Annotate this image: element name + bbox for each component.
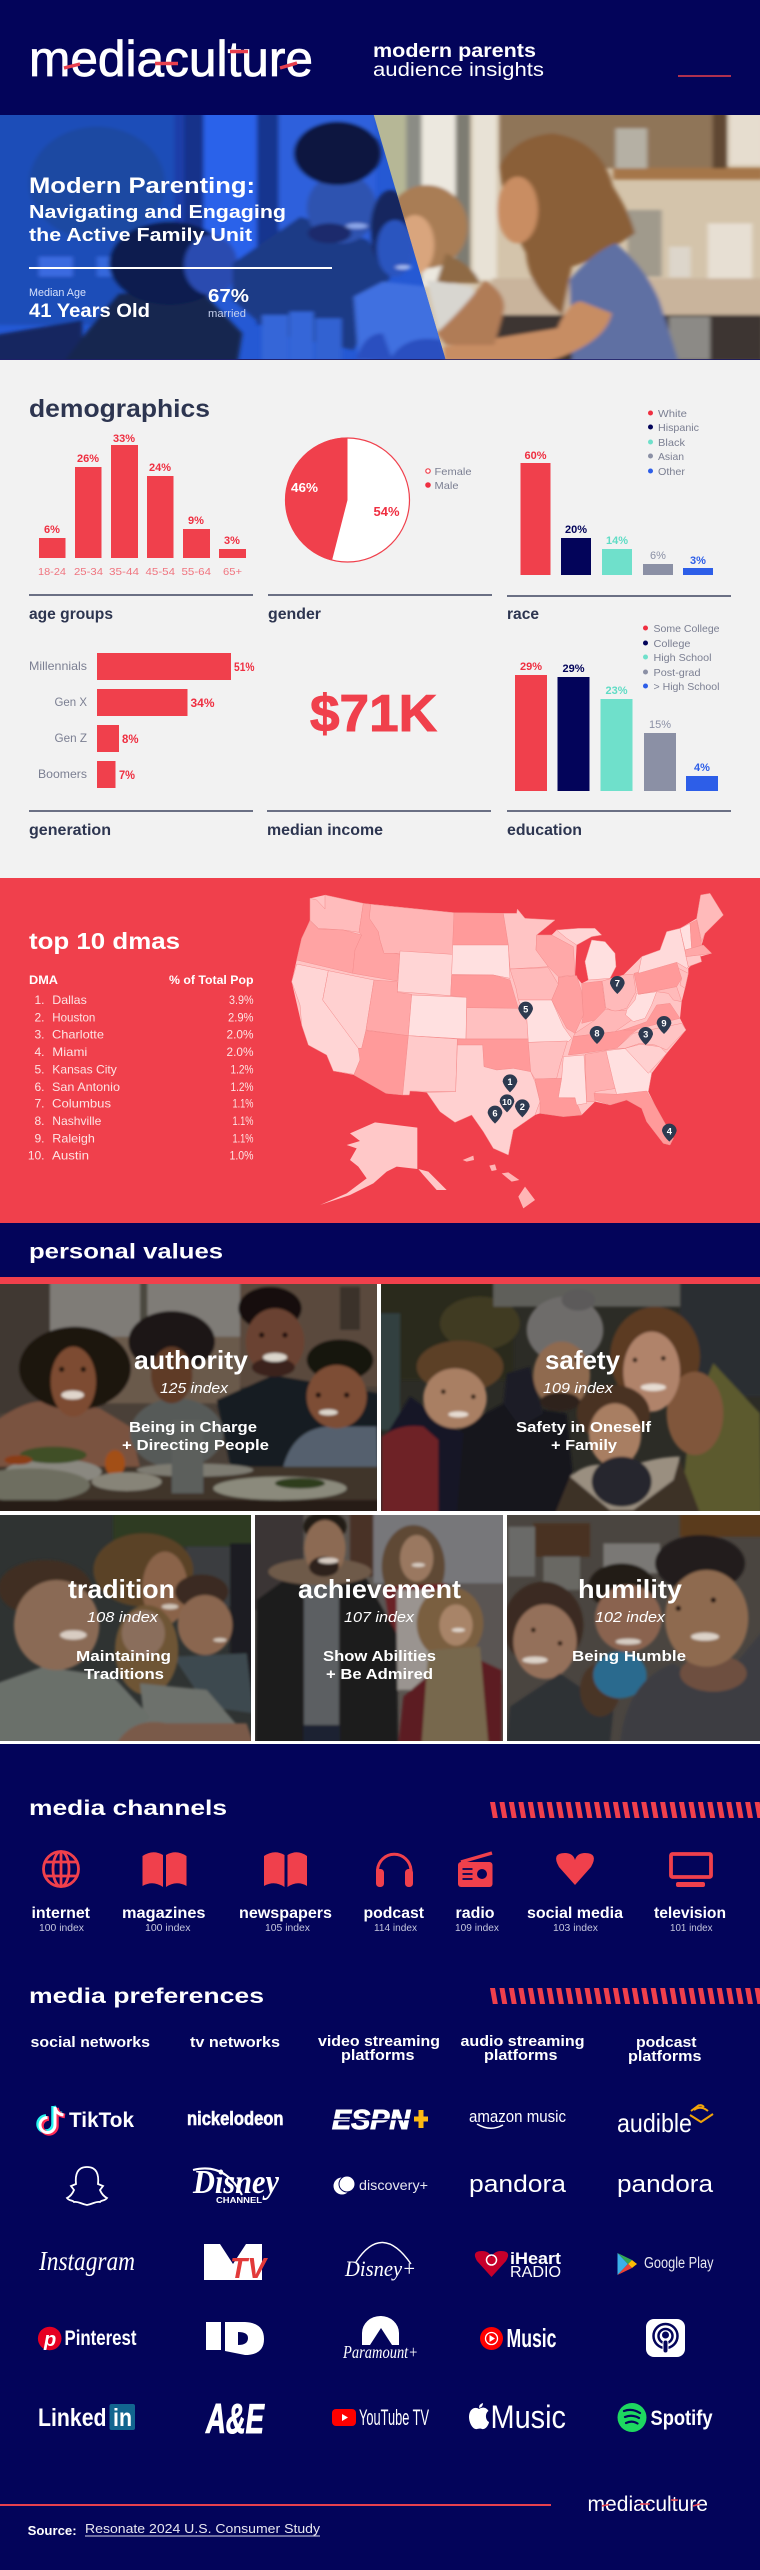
legend: education: College bbox=[654, 638, 691, 650]
pin: 1 dallas bbox=[503, 1074, 517, 1092]
card: tradition bbox=[0, 1510, 253, 1743]
table: dma list: 2. bbox=[34, 1010, 44, 1024]
chart: age groups: 18-24 bbox=[38, 566, 66, 578]
pin: 8 nashville: 8 bbox=[594, 1029, 600, 1039]
source note bbox=[28, 2521, 321, 2538]
legend: education: > High School bbox=[654, 681, 720, 693]
legend: education: Some College bbox=[654, 623, 720, 635]
hawaii bbox=[463, 1156, 535, 1208]
logo: pinterest: Pinterest bbox=[64, 2327, 136, 2350]
card: achievement: achievement bbox=[298, 1574, 461, 1604]
table: dma list: Kansas City bbox=[52, 1062, 117, 1076]
pin: 2 houston: 2 bbox=[520, 1102, 525, 1112]
channel: magazines bbox=[122, 1852, 206, 1934]
pin: 10 austin bbox=[500, 1094, 514, 1112]
logo: mediaculture small: mediaculture bbox=[588, 2493, 708, 2516]
card: achievement: + Be Admired bbox=[326, 1666, 433, 1683]
channel: podcast bbox=[364, 1854, 425, 1934]
chart: age groups: 65+ bbox=[223, 566, 242, 578]
icon: open book bbox=[264, 1852, 307, 1887]
chart: gender pie: 46% bbox=[291, 481, 318, 495]
chart: age groups: 6% bbox=[44, 524, 60, 536]
icon: headphones bbox=[376, 1854, 413, 1887]
chart: gender pie: 54% bbox=[374, 505, 400, 519]
heading: top 10 dmas: top 10 dmas bbox=[29, 928, 180, 954]
table: dma list: Austin bbox=[52, 1149, 89, 1163]
hero title: Navigating and Engaging bbox=[29, 202, 286, 222]
chart: generation: Boomers bbox=[38, 767, 87, 781]
logo: paramount+: Paramount+ bbox=[342, 2342, 418, 2362]
column headers: social networks bbox=[30, 2034, 150, 2051]
logo: spotify: Spotify bbox=[650, 2407, 713, 2430]
icon: radio bbox=[458, 1853, 492, 1887]
channel: internet: internet bbox=[32, 1905, 91, 1922]
heading: media preferences: media preferences bbox=[29, 1985, 264, 2008]
chart: age groups: 3% bbox=[224, 535, 240, 547]
table: dma list: Columbus bbox=[52, 1097, 111, 1111]
logo: pinterest bbox=[38, 2327, 136, 2351]
label: median income: median income bbox=[267, 822, 383, 839]
channel: radio: 109 index bbox=[455, 1923, 499, 1934]
chart: gender pie: Male bbox=[434, 480, 459, 492]
channel: radio bbox=[455, 1853, 499, 1934]
pin: 6 san antonio bbox=[488, 1106, 502, 1124]
table: dma list: 3. bbox=[34, 1028, 44, 1042]
pin: 10 austin: 10 bbox=[502, 1097, 512, 1107]
card: humility: Being Humble bbox=[572, 1648, 686, 1665]
column headers: platforms bbox=[341, 2047, 414, 2064]
hero photo panel bbox=[0, 112, 760, 363]
panel: media channels bbox=[0, 1744, 760, 2570]
channel: social media: 103 index bbox=[553, 1923, 598, 1934]
channel: newspapers: newspapers bbox=[239, 1905, 332, 1922]
stat: married bbox=[208, 286, 249, 320]
table: dma list: % of Total Pop bbox=[169, 973, 254, 987]
chart: race: 20% bbox=[565, 524, 587, 536]
source note: Source: bbox=[28, 2523, 77, 2538]
channel: television bbox=[654, 1854, 726, 1934]
channel: television: 101 index bbox=[670, 1923, 712, 1934]
logo: investigation discovery bbox=[206, 2322, 264, 2355]
label: race: race bbox=[507, 606, 539, 623]
logo: tiktok bbox=[39, 2106, 134, 2134]
table: dma list: 2.0% bbox=[226, 1045, 254, 1059]
pin: 2 houston bbox=[515, 1099, 530, 1117]
table: dma list: 9. bbox=[34, 1131, 44, 1145]
card: humility: 102 index bbox=[595, 1609, 666, 1626]
chart: race: 3% bbox=[690, 555, 706, 567]
chart: age groups: 9% bbox=[188, 515, 204, 527]
pin: 4 miami: 4 bbox=[667, 1126, 673, 1136]
heading: demographics: demographics bbox=[29, 395, 210, 423]
logo: pandora video/audio column: pandora bbox=[469, 2171, 567, 2198]
header title bbox=[373, 40, 544, 81]
table: dma list: DMA bbox=[29, 973, 58, 987]
chart: age groups: 25-34 bbox=[74, 566, 103, 578]
chart: education: 23% bbox=[605, 685, 628, 697]
table: dma list: 7. bbox=[34, 1097, 44, 1111]
stat: median age bbox=[29, 287, 150, 322]
chart: generation: Gen X bbox=[54, 695, 87, 709]
logo: disney+: Disney+ bbox=[344, 2256, 416, 2281]
card: safety: Safety in Oneself bbox=[516, 1419, 652, 1436]
card: authority: authority bbox=[134, 1345, 249, 1375]
chart: age groups: 33% bbox=[113, 433, 135, 445]
photo: blue duotone father and child bbox=[0, 112, 448, 363]
pin: 5 kansas city: 5 bbox=[523, 1004, 528, 1014]
legend: race: Other bbox=[658, 466, 686, 478]
chart: race bbox=[520, 408, 713, 575]
logo: linkedin: in bbox=[113, 2404, 132, 2432]
channel: newspapers: 105 index bbox=[265, 1923, 310, 1934]
table: dma list bbox=[28, 973, 254, 1163]
logo: iheart radio bbox=[475, 2249, 561, 2281]
card: tradition: 108 index bbox=[87, 1609, 159, 1626]
column headers: podcast bbox=[636, 2034, 696, 2051]
channel: internet: 100 index bbox=[39, 1923, 84, 1934]
card: safety: safety bbox=[545, 1345, 621, 1375]
logo: disney channel: CHANNEL bbox=[216, 2195, 262, 2205]
column headers: platforms bbox=[628, 2048, 702, 2065]
logo: disney+ bbox=[344, 2242, 416, 2281]
alaska bbox=[320, 1122, 447, 1205]
pin: 9 raleigh bbox=[657, 1016, 671, 1034]
table: dma list: Dallas bbox=[52, 993, 87, 1007]
footer bbox=[0, 2493, 708, 2538]
icon: heart bbox=[556, 1853, 594, 1885]
chart: education: 4% bbox=[694, 762, 710, 774]
logo: discovery+ bbox=[334, 2176, 428, 2194]
table: dma list: Miami bbox=[52, 1045, 87, 1059]
table: dma list: 10. bbox=[28, 1149, 44, 1163]
pin: 8 nashville bbox=[590, 1026, 604, 1044]
chart: generation: Gen Z bbox=[54, 731, 87, 745]
icon: open book bbox=[142, 1852, 186, 1887]
channel: podcast: podcast bbox=[364, 1905, 425, 1922]
panel: media preferences bbox=[29, 1985, 760, 2442]
table: dma list: 1.2% bbox=[230, 1080, 254, 1094]
table: dma list: 4. bbox=[34, 1045, 44, 1059]
logo: youtube music bbox=[480, 2323, 556, 2353]
label: gender: gender bbox=[268, 606, 321, 623]
column headers bbox=[30, 2033, 702, 2065]
logo: mediaculture: mediaculture bbox=[29, 31, 313, 87]
card: authority: 125 index bbox=[160, 1380, 229, 1397]
logo: youtube tv bbox=[332, 2405, 429, 2430]
table: dma list: 3.9% bbox=[229, 993, 254, 1007]
label: education: education bbox=[507, 822, 582, 839]
logo: iheart radio: RADIO bbox=[510, 2264, 561, 2281]
table: dma list: 5. bbox=[34, 1062, 44, 1076]
card: tradition: Maintaining bbox=[76, 1648, 171, 1665]
table: dma list: 1.2% bbox=[230, 1062, 254, 1076]
logo: iheart radio: iHeart bbox=[510, 2249, 561, 2268]
chart: age groups: 45-54 bbox=[146, 566, 175, 578]
column headers: platforms bbox=[484, 2047, 558, 2064]
logo: snapchat bbox=[67, 2167, 107, 2205]
pin: 7 columbus bbox=[610, 976, 625, 994]
chart: education: 15% bbox=[649, 719, 671, 731]
logo: pandora podcast column: pandora bbox=[617, 2171, 714, 2198]
logo: investigation discovery: ID bbox=[206, 2352, 207, 2354]
hero title: the Active Family Unit bbox=[29, 225, 252, 245]
logo: linkedin: Linked bbox=[38, 2404, 106, 2432]
column headers: audio streaming bbox=[460, 2033, 584, 2050]
panel: demographics bbox=[0, 360, 760, 878]
legend: race: Black bbox=[658, 437, 686, 449]
table: dma list: Raleigh bbox=[52, 1131, 95, 1145]
pin: 9 raleigh: 9 bbox=[661, 1019, 667, 1029]
logo: apple music: Music bbox=[490, 2399, 566, 2435]
chart: age groups: 26% bbox=[77, 453, 99, 465]
channel: newspapers bbox=[239, 1852, 332, 1934]
icon: tv bbox=[671, 1854, 711, 1887]
header title: modern parents bbox=[373, 40, 536, 62]
channel: internet bbox=[32, 1851, 91, 1934]
logo: tiktok: TikTok bbox=[69, 2109, 134, 2132]
table: dma list: 1.1% bbox=[232, 1131, 254, 1145]
logo: mtv: TV bbox=[230, 2253, 269, 2285]
stat: married: married bbox=[208, 308, 246, 320]
column headers: tv networks bbox=[190, 2034, 280, 2051]
table: dma list: 1.1% bbox=[232, 1114, 254, 1128]
table: dma list: 1. bbox=[34, 993, 44, 1007]
hero title bbox=[29, 173, 286, 245]
logo: youtube music: Music bbox=[506, 2323, 556, 2353]
logo: nickelodeon: nickelodeon bbox=[187, 2109, 284, 2130]
table: dma list: Nashville bbox=[52, 1114, 102, 1128]
icon: globe bbox=[44, 1851, 78, 1887]
logo: youtube tv: YouTube TV bbox=[359, 2405, 429, 2430]
chart: generation: 51% bbox=[234, 660, 255, 674]
chart: generation: 8% bbox=[122, 732, 139, 746]
heading: media channels: media channels bbox=[29, 1797, 227, 1820]
chart: gender pie: Female bbox=[434, 466, 472, 478]
logo: mtv bbox=[204, 2244, 269, 2285]
legend: race: Hispanic bbox=[658, 422, 699, 434]
chart: age groups: 35-44 bbox=[109, 566, 139, 578]
chart: generation: 7% bbox=[119, 768, 135, 782]
logo: a&e: A&E bbox=[205, 2395, 265, 2442]
logo: audible: audible bbox=[617, 2108, 692, 2138]
legend: education: High School bbox=[654, 652, 712, 664]
channel: television: television bbox=[654, 1905, 726, 1922]
chart: race: 6% bbox=[650, 550, 666, 562]
header title: audience insights bbox=[373, 59, 544, 81]
channel: magazines: magazines bbox=[122, 1905, 206, 1922]
pin: 7 columbus: 7 bbox=[615, 979, 620, 989]
pin: 3 charlotte: 3 bbox=[643, 1030, 648, 1040]
channel: radio: radio bbox=[456, 1905, 495, 1922]
channel: magazines: 100 index bbox=[145, 1923, 190, 1934]
table: dma list: 2.9% bbox=[228, 1010, 254, 1024]
chart: age groups: 55-64 bbox=[182, 566, 211, 578]
logo: disney channel: Disney bbox=[192, 2164, 280, 2201]
chart: generation bbox=[29, 653, 255, 788]
map: united states bbox=[292, 893, 723, 1208]
logo: amazon music: amazon music bbox=[469, 2107, 566, 2126]
logo: apple podcasts bbox=[646, 2319, 685, 2357]
panel: top 10 dmas bbox=[0, 878, 760, 1223]
table: dma list: 2.0% bbox=[226, 1028, 254, 1042]
card: safety bbox=[377, 1280, 760, 1513]
table: dma list: 6. bbox=[34, 1080, 44, 1094]
card: authority bbox=[0, 1280, 380, 1513]
card: humility: humility bbox=[578, 1574, 683, 1604]
card: authority: + Directing People bbox=[122, 1437, 269, 1454]
logo: spotify bbox=[618, 2403, 713, 2432]
legend: race: White bbox=[658, 408, 687, 420]
label: generation: generation bbox=[29, 822, 111, 839]
card: achievement: Show Abilities bbox=[323, 1648, 436, 1665]
channel: social media: social media bbox=[527, 1905, 623, 1922]
card: safety: + Family bbox=[551, 1437, 618, 1454]
stat: median income: $71K bbox=[310, 685, 437, 743]
pin: 6 san antonio: 6 bbox=[492, 1108, 498, 1118]
card: authority: Being in Charge bbox=[129, 1419, 257, 1436]
logo: pinterest: p bbox=[43, 2329, 56, 2351]
chart: generation: Millennials bbox=[29, 659, 87, 673]
pin: 3 charlotte bbox=[638, 1027, 653, 1045]
legend: race bbox=[648, 408, 699, 478]
card: humility bbox=[503, 1513, 760, 1743]
chart: generation: 34% bbox=[190, 696, 215, 710]
chart: gender pie bbox=[285, 438, 472, 562]
header band bbox=[0, 0, 760, 115]
pin: 1 dallas: 1 bbox=[507, 1077, 513, 1087]
table: dma list: Houston bbox=[52, 1010, 95, 1024]
column headers: video streaming bbox=[318, 2033, 440, 2050]
channel: social media bbox=[527, 1853, 623, 1934]
chart: race: 60% bbox=[524, 450, 547, 462]
stat: median age: Median Age bbox=[29, 287, 86, 299]
table: dma list: San Antonio bbox=[52, 1080, 120, 1094]
heading: personal values: personal values bbox=[29, 1240, 223, 1264]
legend: education: Post-grad bbox=[654, 667, 701, 679]
pin: 4 miami bbox=[662, 1124, 677, 1142]
table: dma list: 1.0% bbox=[230, 1149, 254, 1163]
source note: Resonate 2024 U.S. Consumer Study bbox=[85, 2521, 321, 2536]
table: dma list: 8. bbox=[34, 1114, 44, 1128]
label: age groups: age groups bbox=[29, 606, 113, 623]
chart: education bbox=[515, 623, 720, 791]
card: tradition: tradition bbox=[68, 1574, 175, 1604]
card: tradition: Traditions bbox=[84, 1666, 164, 1683]
table: dma list: 1.1% bbox=[232, 1097, 254, 1111]
card: achievement: 107 index bbox=[344, 1609, 415, 1626]
legend: education bbox=[643, 623, 720, 693]
chart: education: 29% bbox=[520, 661, 542, 673]
logo: discovery+: discovery+ bbox=[359, 2177, 428, 2193]
pin: 5 kansas city bbox=[518, 1002, 533, 1020]
hero title: Modern Parenting: bbox=[29, 173, 255, 198]
chart: age groups: 24% bbox=[149, 462, 171, 474]
chart: age groups bbox=[38, 433, 246, 578]
chart: race: 14% bbox=[606, 535, 628, 547]
table: dma list: Charlotte bbox=[52, 1028, 104, 1042]
logo: google play bbox=[618, 2253, 714, 2275]
stat: median age: 41 Years Old bbox=[29, 301, 150, 322]
panel: personal values bbox=[0, 1223, 760, 1745]
logo: instagram: Instagram bbox=[38, 2246, 135, 2276]
stat: married: 67% bbox=[208, 286, 249, 306]
channel: podcast: 114 index bbox=[374, 1923, 417, 1934]
logo: espn+: ESPN bbox=[332, 2104, 411, 2135]
card: safety: 109 index bbox=[543, 1380, 614, 1397]
legend: race: Asian bbox=[658, 451, 684, 463]
logo: paramount+ bbox=[342, 2316, 418, 2362]
card: achievement bbox=[253, 1510, 507, 1745]
chart: education: 29% bbox=[562, 663, 585, 675]
photo: warm kitchen with mother bbox=[0, 112, 760, 362]
logo: google play: Google Play bbox=[644, 2255, 714, 2272]
